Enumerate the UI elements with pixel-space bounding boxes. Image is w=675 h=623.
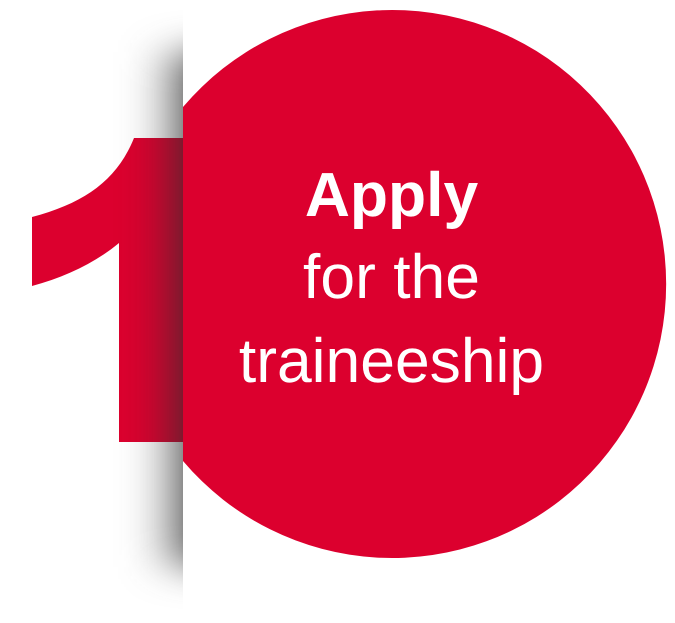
circle text [239,161,544,396]
heading: Apply: Apply [305,161,478,230]
numeral 1 [32,138,183,442]
fold shadow [134,27,183,592]
red circle [183,10,666,558]
text: for the: for the [303,243,480,312]
text: traineeship: traineeship [239,327,544,396]
